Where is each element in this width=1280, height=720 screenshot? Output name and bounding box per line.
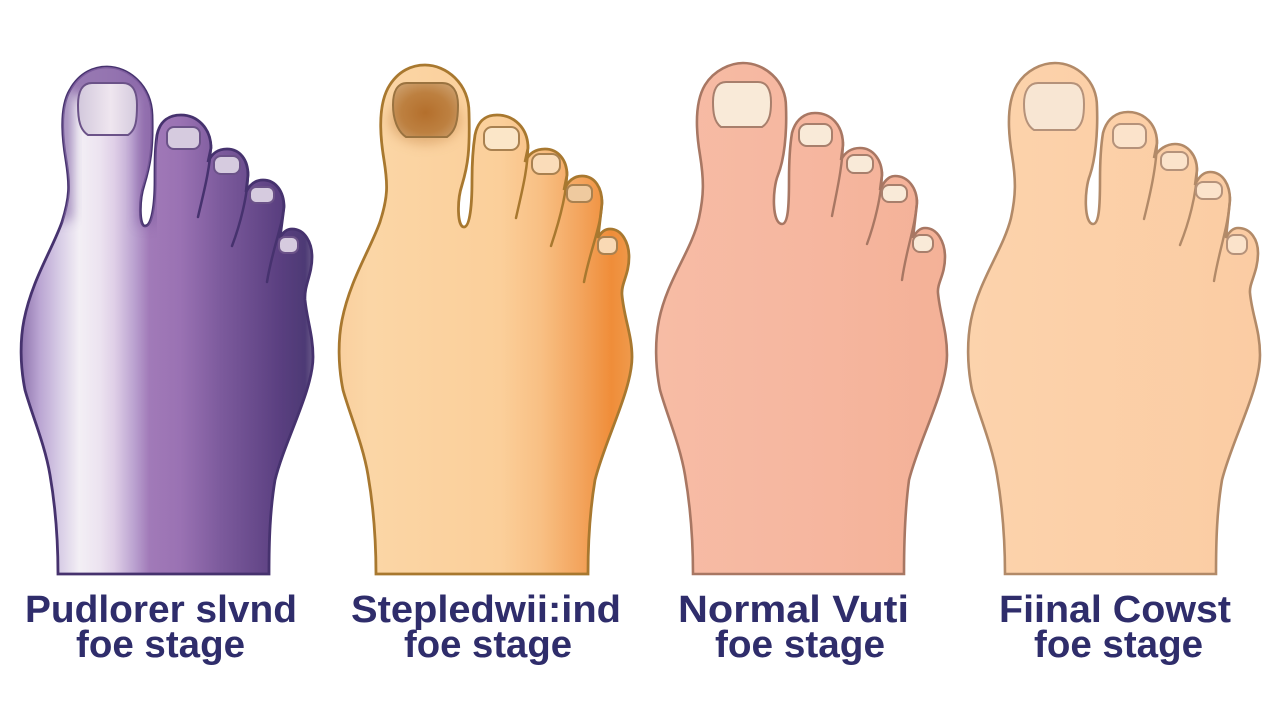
label: pink stage: foe stage: [715, 624, 885, 666]
toe separators: [1144, 140, 1230, 281]
panel: cream foot: [968, 63, 1260, 574]
nail bruise halo: [389, 96, 461, 144]
panel: orange foot: [339, 65, 632, 574]
toenails: [78, 83, 298, 253]
foot outline: cream: [968, 63, 1260, 574]
foot outline: orange: [339, 65, 632, 574]
label: purple stage: Pudlorer slvnd: [25, 589, 297, 631]
panel: pink foot: [656, 63, 947, 574]
toenails: [713, 82, 933, 252]
label: purple stage: [25, 589, 297, 666]
panel: purple foot: [21, 54, 313, 574]
label: pink stage: [678, 589, 909, 666]
label: cream stage: foe stage: [1034, 624, 1203, 666]
label: orange stage: Stepledwii:ind: [351, 589, 621, 631]
label: pink stage: Normal Vuti: [678, 589, 909, 631]
toenails: [393, 83, 617, 254]
label: orange stage: foe stage: [404, 624, 572, 666]
toe separators: [516, 145, 602, 282]
toe separators: [832, 142, 917, 280]
label: cream stage: [999, 589, 1231, 666]
toenails: [1024, 83, 1247, 254]
big toe shading: [61, 67, 157, 228]
label: cream stage: Fiinal Cowst: [999, 589, 1231, 631]
label: orange stage: [351, 589, 621, 666]
foot outline: pink: [656, 63, 947, 574]
foot outline: purple: [21, 67, 313, 574]
label: purple stage: foe stage: [76, 624, 245, 666]
toe separators: [198, 145, 284, 282]
